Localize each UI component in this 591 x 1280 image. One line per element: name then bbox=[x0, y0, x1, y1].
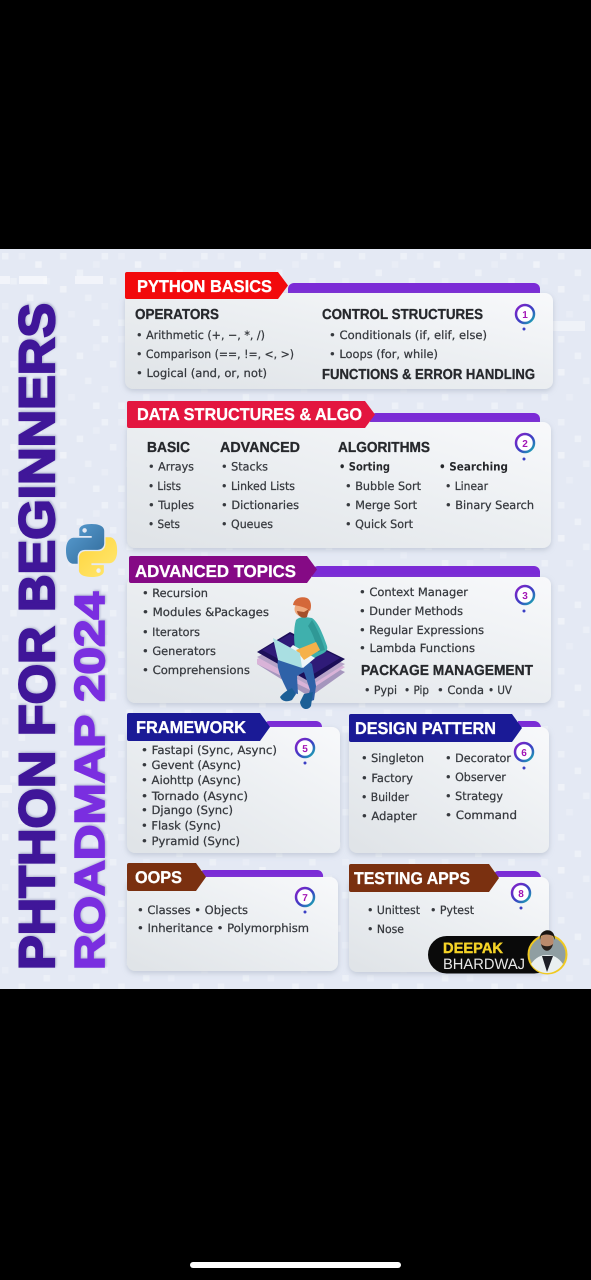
panel: data structures and algorithms: DATA STRUCTURES & ALGO bbox=[137, 405, 362, 424]
panel: design pattern: 6 bbox=[521, 748, 527, 759]
panel: framework: 5 bbox=[302, 744, 308, 755]
panel: python basics: • Conditionals (if, elif, else) bbox=[329, 328, 487, 342]
panel: advanced topics: PACKAGE MANAGEMENT bbox=[361, 663, 533, 679]
panel: testing apps: • Nose bbox=[367, 922, 404, 936]
panel: advanced topics: • Pypi bbox=[364, 683, 397, 697]
panel: design pattern: DESIGN PATTERN bbox=[355, 719, 496, 738]
panel: advanced topics: • Pip bbox=[404, 683, 429, 697]
panel: framework: FRAMEWORK bbox=[136, 718, 247, 737]
panel: python basics: • Comparison (==, !=, <, >) bbox=[136, 347, 294, 361]
panel: advanced topics: • Dunder Methods bbox=[359, 604, 463, 618]
panel: oops bbox=[127, 863, 338, 971]
panel: data structures and algorithms bbox=[127, 401, 551, 548]
panel: python basics: 1 bbox=[522, 310, 528, 321]
panel: advanced topics: • Modules &Packages bbox=[142, 605, 269, 619]
panel: data structures and algorithms: • Merge Sort bbox=[345, 498, 417, 512]
panel: data structures and algorithms: • Stacks bbox=[221, 460, 268, 474]
panel: advanced topics: • Lambda Functions bbox=[359, 641, 475, 655]
panel: data structures and algorithms: • Binary Search bbox=[445, 498, 534, 512]
panel: advanced topics: • UV bbox=[488, 683, 512, 697]
author badge: Deepak Bhardwaj bbox=[428, 930, 566, 974]
panel: data structures and algorithms: • Linear bbox=[445, 479, 488, 493]
panel: oops: OOPS bbox=[135, 868, 182, 887]
home indicator bar bbox=[190, 1262, 401, 1268]
panel: data structures and algorithms: ADVANCED bbox=[220, 440, 300, 456]
panel: data structures and algorithms: • Queues bbox=[221, 517, 273, 531]
panel: advanced topics: • Regular Expressions bbox=[359, 623, 484, 637]
panel: design pattern: • Singleton bbox=[361, 751, 424, 765]
panel: data structures and algorithms: • Tuples bbox=[148, 498, 194, 512]
panel: data structures and algorithms: 2 bbox=[522, 439, 528, 450]
panel: testing apps: • Pytest bbox=[430, 903, 474, 917]
panel: data structures and algorithms: ALGORITHMS bbox=[338, 440, 430, 456]
panel: data structures and algorithms: • Quick Sort bbox=[345, 517, 413, 531]
author badge: Deepak Bhardwaj: BHARDWAJ bbox=[443, 956, 525, 973]
panel: advanced topics: ADVANCED TOPICS bbox=[135, 562, 296, 581]
panel: oops: • Classes • Objects bbox=[137, 903, 248, 917]
panel: design pattern: • Adapter bbox=[361, 809, 417, 823]
panel: framework: • Aiohttp (Async) bbox=[141, 773, 241, 787]
panel: design pattern: • Builder bbox=[361, 790, 409, 804]
panel: data structures and algorithms: • Bubble Sort bbox=[345, 479, 421, 493]
panel: design pattern bbox=[349, 714, 549, 853]
vertical title: Python for Beginners: PHTHON FOR BEGINNERS bbox=[9, 303, 65, 970]
panel: framework: • Flask (Sync) bbox=[141, 818, 221, 832]
panel: advanced topics bbox=[127, 556, 551, 703]
infographic background bbox=[0, 249, 591, 989]
panel: design pattern: • Decorator bbox=[445, 751, 511, 765]
panel: python basics: • Loops (for, while) bbox=[329, 347, 438, 361]
panel: design pattern: • Command bbox=[445, 808, 517, 822]
panel: python basics: OPERATORS bbox=[135, 307, 219, 323]
panel: data structures and algorithms: • Linked Lists bbox=[221, 479, 295, 493]
panel: python basics: • Logical (and, or, not) bbox=[136, 366, 267, 380]
panel: framework: • Tornado (Async) bbox=[141, 789, 248, 803]
panel: testing apps: TESTING APPS bbox=[354, 869, 470, 888]
panel: data structures and algorithms: • Sets bbox=[148, 517, 180, 531]
black top band bbox=[0, 0, 591, 249]
panel: python basics: • Arithmetic (+, −, *, /) bbox=[136, 328, 265, 342]
panel: data structures and algorithms: • Dictionaries bbox=[221, 498, 299, 512]
panel: testing apps: 8 bbox=[518, 889, 524, 900]
panel: design pattern: • Strategy bbox=[445, 789, 503, 803]
panel: advanced topics: • Context Manager bbox=[359, 585, 468, 599]
panel: design pattern: • Observer bbox=[445, 770, 506, 784]
panel: advanced topics: • Recursion bbox=[142, 586, 208, 600]
panel: advanced topics: 3 bbox=[522, 591, 528, 602]
panel: advanced topics: • Iterators bbox=[142, 625, 200, 639]
panel: testing apps bbox=[349, 864, 549, 972]
vertical title: Roadmap 2024: ROADMAP 2024 bbox=[66, 591, 113, 970]
panel: data structures and algorithms: • Arrays bbox=[148, 460, 194, 474]
panel: framework: • Pyramid (Sync) bbox=[141, 834, 240, 848]
panel: data structures and algorithms: • Searching bbox=[439, 460, 508, 474]
icon: python logo bbox=[66, 524, 117, 577]
panel: advanced topics: • Generators bbox=[142, 644, 216, 658]
black bottom band bbox=[0, 989, 591, 1280]
panel: framework bbox=[127, 713, 340, 853]
illustration: man with laptop sitting on books bbox=[257, 597, 345, 709]
panel: oops: • Inheritance • Polymorphism bbox=[137, 921, 309, 935]
panel: data structures and algorithms: • Sorting bbox=[339, 460, 390, 474]
panel: oops: 7 bbox=[302, 893, 308, 904]
panel: framework: • Django (Sync) bbox=[141, 803, 233, 817]
panel: advanced topics: • Comprehensions bbox=[142, 663, 250, 677]
panel: design pattern: • Factory bbox=[361, 771, 413, 785]
panel: framework: • Gevent (Async) bbox=[141, 758, 241, 772]
panel: advanced topics: • Conda bbox=[437, 683, 484, 697]
author badge: Deepak Bhardwaj: DEEPAK bbox=[443, 940, 503, 957]
panel: framework: • Fastapi (Sync, Async) bbox=[141, 743, 277, 757]
panel: python basics: FUNCTIONS & ERROR HANDLING bbox=[322, 367, 535, 383]
panel: testing apps: • Unittest bbox=[367, 903, 420, 917]
panel: data structures and algorithms: BASIC bbox=[147, 440, 190, 456]
panel: data structures and algorithms: • Lists bbox=[148, 479, 181, 493]
panel: python basics: PYTHON BASICS bbox=[137, 277, 272, 296]
panel: python basics bbox=[125, 272, 553, 389]
panel: python basics: CONTROL STRUCTURES bbox=[322, 307, 483, 323]
